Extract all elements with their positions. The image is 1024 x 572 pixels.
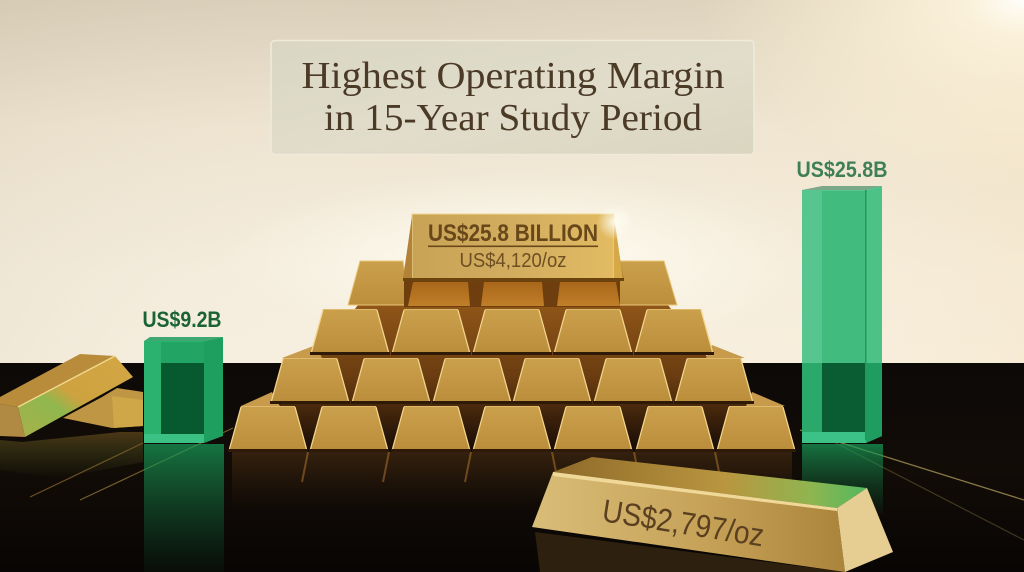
floor light streaks (30, 428, 1024, 540)
left stacked gold bars (0, 354, 143, 437)
gold bar pyramid (228, 261, 796, 452)
third tier (310, 309, 714, 355)
top gold bar (403, 214, 624, 281)
right green bar (796, 157, 888, 443)
lower bar (63, 388, 143, 428)
pyramid ledges (241, 345, 785, 406)
pyramid backing (240, 305, 786, 449)
left bars reflection (0, 432, 143, 478)
upper bar top (0, 354, 115, 407)
background wall (0, 0, 1024, 364)
gold pyramid reflection (232, 452, 792, 512)
second tier (270, 358, 754, 404)
foreground gold bar (532, 457, 893, 572)
left green bar reflection (144, 444, 224, 572)
upper bar long face (18, 356, 133, 437)
top bar headline: US$25.8 BILLION (428, 220, 598, 247)
side bars of fourth tier (348, 261, 677, 305)
sparkle on top bar (597, 204, 633, 240)
shadowed bars under top bar (404, 280, 620, 307)
left bar value: US$9.2B (142, 307, 222, 332)
top bar price: US$4,120/oz (460, 250, 566, 272)
title text line 2: in 15-Year Study Period (324, 97, 702, 139)
upper bar end (0, 404, 25, 437)
foreground bar price: US$2,797/oz (600, 492, 767, 553)
right bar value: US$25.8B (796, 157, 888, 182)
black reflective floor (0, 363, 1024, 572)
left green bar (142, 307, 223, 443)
foreground bar reflection (535, 532, 845, 572)
title panel (271, 40, 754, 154)
title text: Highest Operating Margin (302, 55, 724, 97)
bottom tier (228, 406, 796, 452)
right green bar reflection (802, 444, 883, 514)
top bar divider (428, 246, 598, 247)
